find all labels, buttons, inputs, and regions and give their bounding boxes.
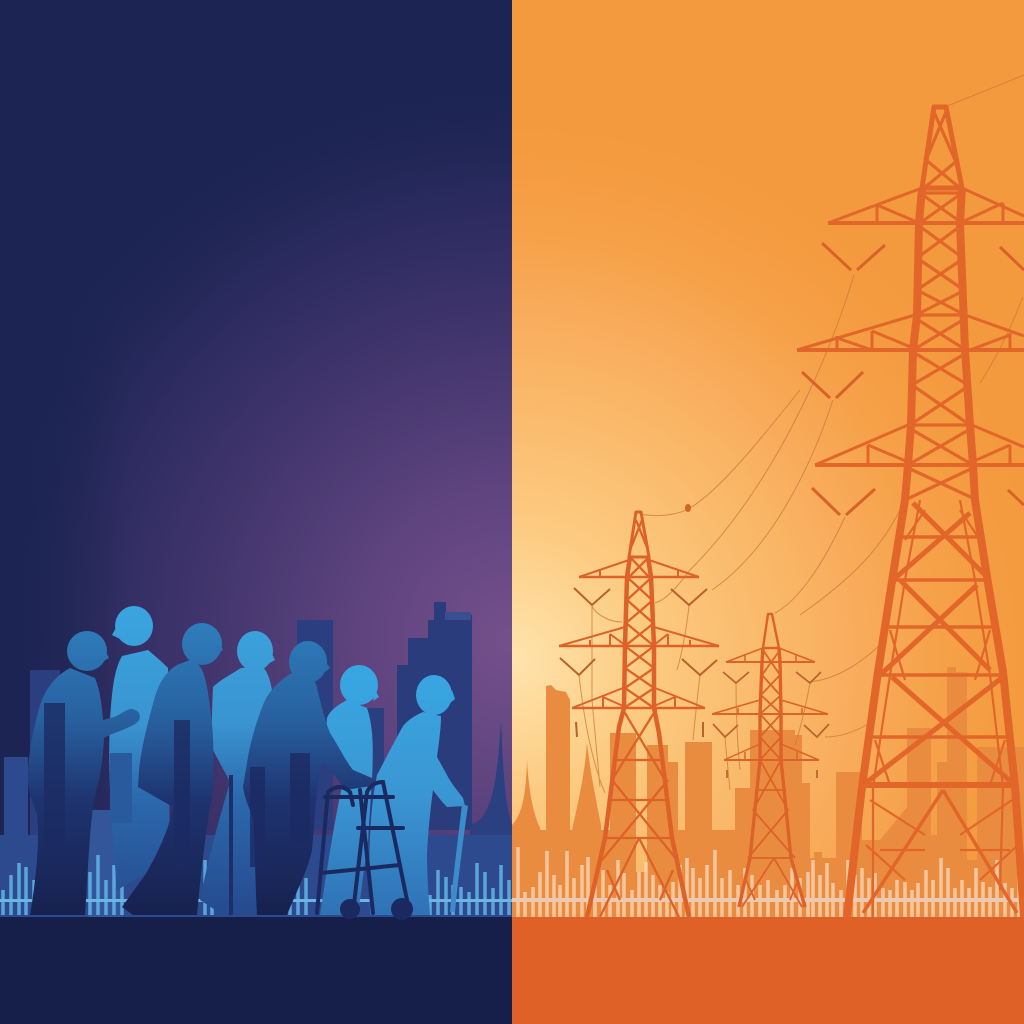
right equaliser bars <box>512 847 1024 917</box>
person 7 with cane <box>369 675 468 915</box>
tower frame <box>629 512 649 557</box>
person 1 gesturing <box>28 631 140 915</box>
person 6 <box>320 665 379 915</box>
small pylon one insulators <box>560 588 717 737</box>
panel: ground band right <box>512 917 1024 1024</box>
left equaliser bars <box>0 855 512 915</box>
pylon upper lattice <box>905 112 977 500</box>
person 2 <box>109 606 170 890</box>
small pylon one <box>559 512 719 917</box>
panel: ground band left <box>0 917 512 1024</box>
large pylon insulators <box>802 243 1024 515</box>
tower arms <box>559 577 719 708</box>
small pylon two <box>712 614 828 907</box>
pylon main legs <box>847 188 1024 917</box>
right city skyline <box>512 667 1024 917</box>
people walking group <box>28 606 468 915</box>
panel: right sunset background <box>512 0 1024 1024</box>
left city skyline <box>0 602 512 917</box>
pylon cross arms <box>797 223 1024 465</box>
dark skyline reflected in figures <box>44 703 310 870</box>
cane of second walker <box>229 775 233 915</box>
tower frame <box>763 614 779 648</box>
panel: left dusk background <box>0 0 512 1024</box>
tower lattice <box>742 650 802 907</box>
pylon arm trusses <box>797 188 1024 465</box>
person 4 <box>200 631 280 915</box>
tower lattice <box>600 520 679 917</box>
person 5 pushing walker <box>243 641 374 915</box>
tower arms <box>712 662 828 760</box>
wire marker <box>685 504 691 512</box>
large pylon <box>797 107 1024 917</box>
person 3 <box>122 623 223 915</box>
walking frame <box>317 782 411 918</box>
pylon lower lattice <box>863 503 1017 787</box>
small pylon two insulators <box>713 672 829 778</box>
power lines <box>579 75 1024 793</box>
pylon spire <box>922 107 962 188</box>
